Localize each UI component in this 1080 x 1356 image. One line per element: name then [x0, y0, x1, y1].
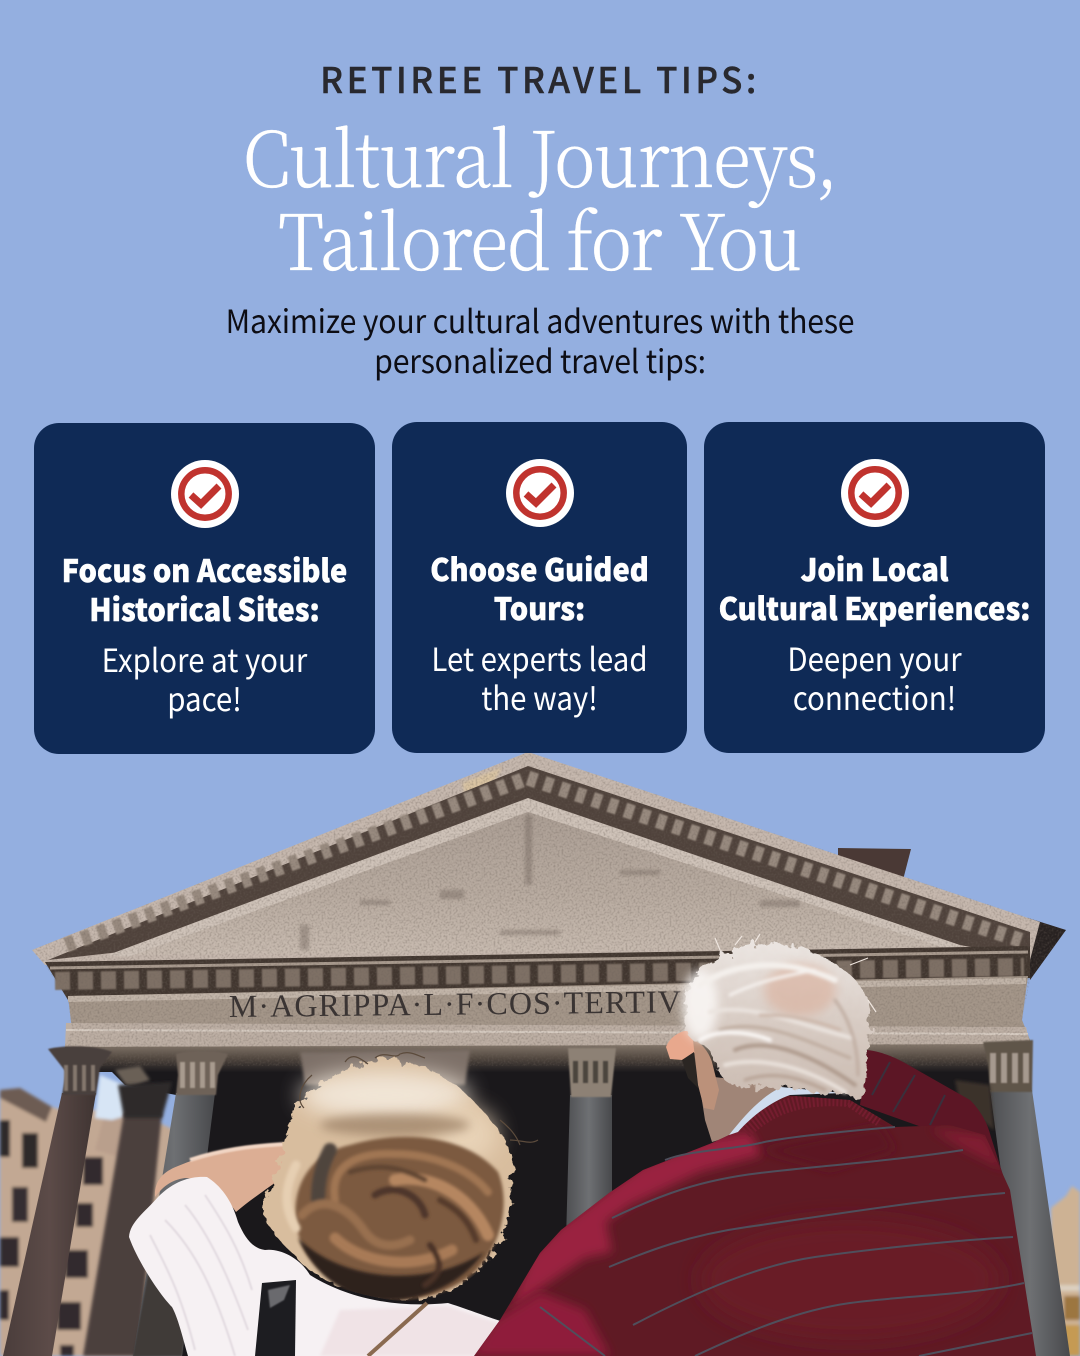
- tip 3 text: connection!: [793, 674, 956, 720]
- man's hair: [682, 934, 876, 1098]
- column: right: [990, 1090, 1070, 1356]
- man's ear: [693, 1040, 719, 1110]
- man's raised arm: [860, 1050, 1003, 1175]
- subtitle: personalized travel tips:: [374, 337, 706, 383]
- icon: red check mark: [841, 459, 909, 527]
- man's shirt collar: [729, 1087, 843, 1135]
- collar ribbing: [745, 1099, 880, 1132]
- column: behind hair: [300, 1050, 470, 1085]
- tip 2 text: the way!: [481, 674, 598, 720]
- tip 3 heading: Cultural Experiences:: [719, 584, 1030, 629]
- man: [470, 934, 1050, 1356]
- photo: couple viewing the Pantheon: [0, 753, 1080, 1356]
- subtitle: Maximize your cultural adventures with these: [226, 297, 854, 343]
- icon: red check mark: [171, 460, 239, 528]
- black bag strap: [255, 1280, 296, 1356]
- column: front left: [3, 1093, 96, 1356]
- woman's white shirt: [129, 1177, 504, 1356]
- tip 1 heading: Historical Sites:: [89, 585, 320, 630]
- main title: Tailored for You: [278, 182, 802, 293]
- ceiling beam: [115, 1066, 150, 1088]
- tan bag strap: [368, 1303, 427, 1356]
- dark side of the roof: [1028, 918, 1066, 980]
- left background buildings: [0, 1075, 175, 1356]
- tip 2 heading: [430, 545, 649, 629]
- woman: [129, 1053, 538, 1356]
- tip 2 text: Let experts lead: [431, 635, 648, 681]
- right background building: [1051, 1186, 1080, 1356]
- tip 2 heading: Tours:: [494, 584, 585, 629]
- tip 1 heading: Focus on Accessible: [62, 546, 347, 591]
- inscription: M·AGRIPPA·L·F·COS·TERTIV: [229, 983, 681, 1024]
- column: centre: [566, 1095, 612, 1240]
- subtitle: [226, 297, 854, 383]
- flyaway strands: [715, 934, 876, 1012]
- sweater stripes: [540, 1127, 1032, 1356]
- man's hand: [666, 1030, 696, 1060]
- hair bottom shadow: [298, 1238, 484, 1301]
- stone grain: [30, 750, 1070, 1070]
- man's sweater: [470, 1090, 1050, 1356]
- hair curls: [287, 1150, 488, 1285]
- tip 3 heading: [719, 545, 1030, 629]
- tip 3 heading: Join Local: [800, 545, 949, 590]
- dark portico interior: [100, 1045, 1040, 1356]
- panel: tip 3 local cultural experiences: [704, 422, 1045, 753]
- tip 1 text: [102, 636, 308, 721]
- column: far left behind: [83, 1113, 162, 1356]
- tip 3 text: [787, 635, 962, 720]
- tympanum: [125, 806, 955, 955]
- main title: Cultural Journeys,: [243, 99, 837, 210]
- tip 3 text: Deepen your: [787, 635, 962, 681]
- tip 1 text: pace!: [167, 675, 242, 721]
- hair silhouette: [262, 1060, 513, 1299]
- top of the entablature: [45, 946, 1030, 1000]
- frieze and architrave: [65, 976, 1030, 1048]
- tip 1 heading: [62, 546, 347, 630]
- rear attic block: [838, 848, 911, 880]
- pediment outer cornice: [32, 752, 1040, 965]
- panel: tip 2 guided tours: [392, 422, 687, 753]
- columns: [3, 1040, 1070, 1356]
- tip 2 heading: Choose Guided: [430, 545, 649, 590]
- hair lower brown mass: [287, 1137, 504, 1301]
- glasses: [682, 1052, 698, 1088]
- icon: red check mark: [506, 459, 574, 527]
- panel: tip 1 accessible historical sites: [34, 423, 375, 754]
- column: second grey: [133, 1093, 215, 1356]
- lit shoulder: [510, 1132, 762, 1310]
- woman's arm: [155, 1143, 290, 1212]
- woman's hair: [262, 1053, 538, 1301]
- kicker heading: RETIREE TRAVEL TIPS:: [320, 53, 760, 104]
- rosette band: [48, 766, 1030, 960]
- flyaway strands: [300, 1053, 538, 1145]
- tip 1 text: Explore at your: [102, 636, 307, 682]
- tip 2 text: [431, 635, 648, 720]
- main title: [243, 99, 837, 293]
- hair silhouette: [684, 943, 870, 1098]
- hair strands: [700, 965, 858, 1092]
- man's neck: [698, 1075, 780, 1142]
- lens flare: [462, 767, 502, 797]
- Pantheon building: [30, 750, 1070, 1356]
